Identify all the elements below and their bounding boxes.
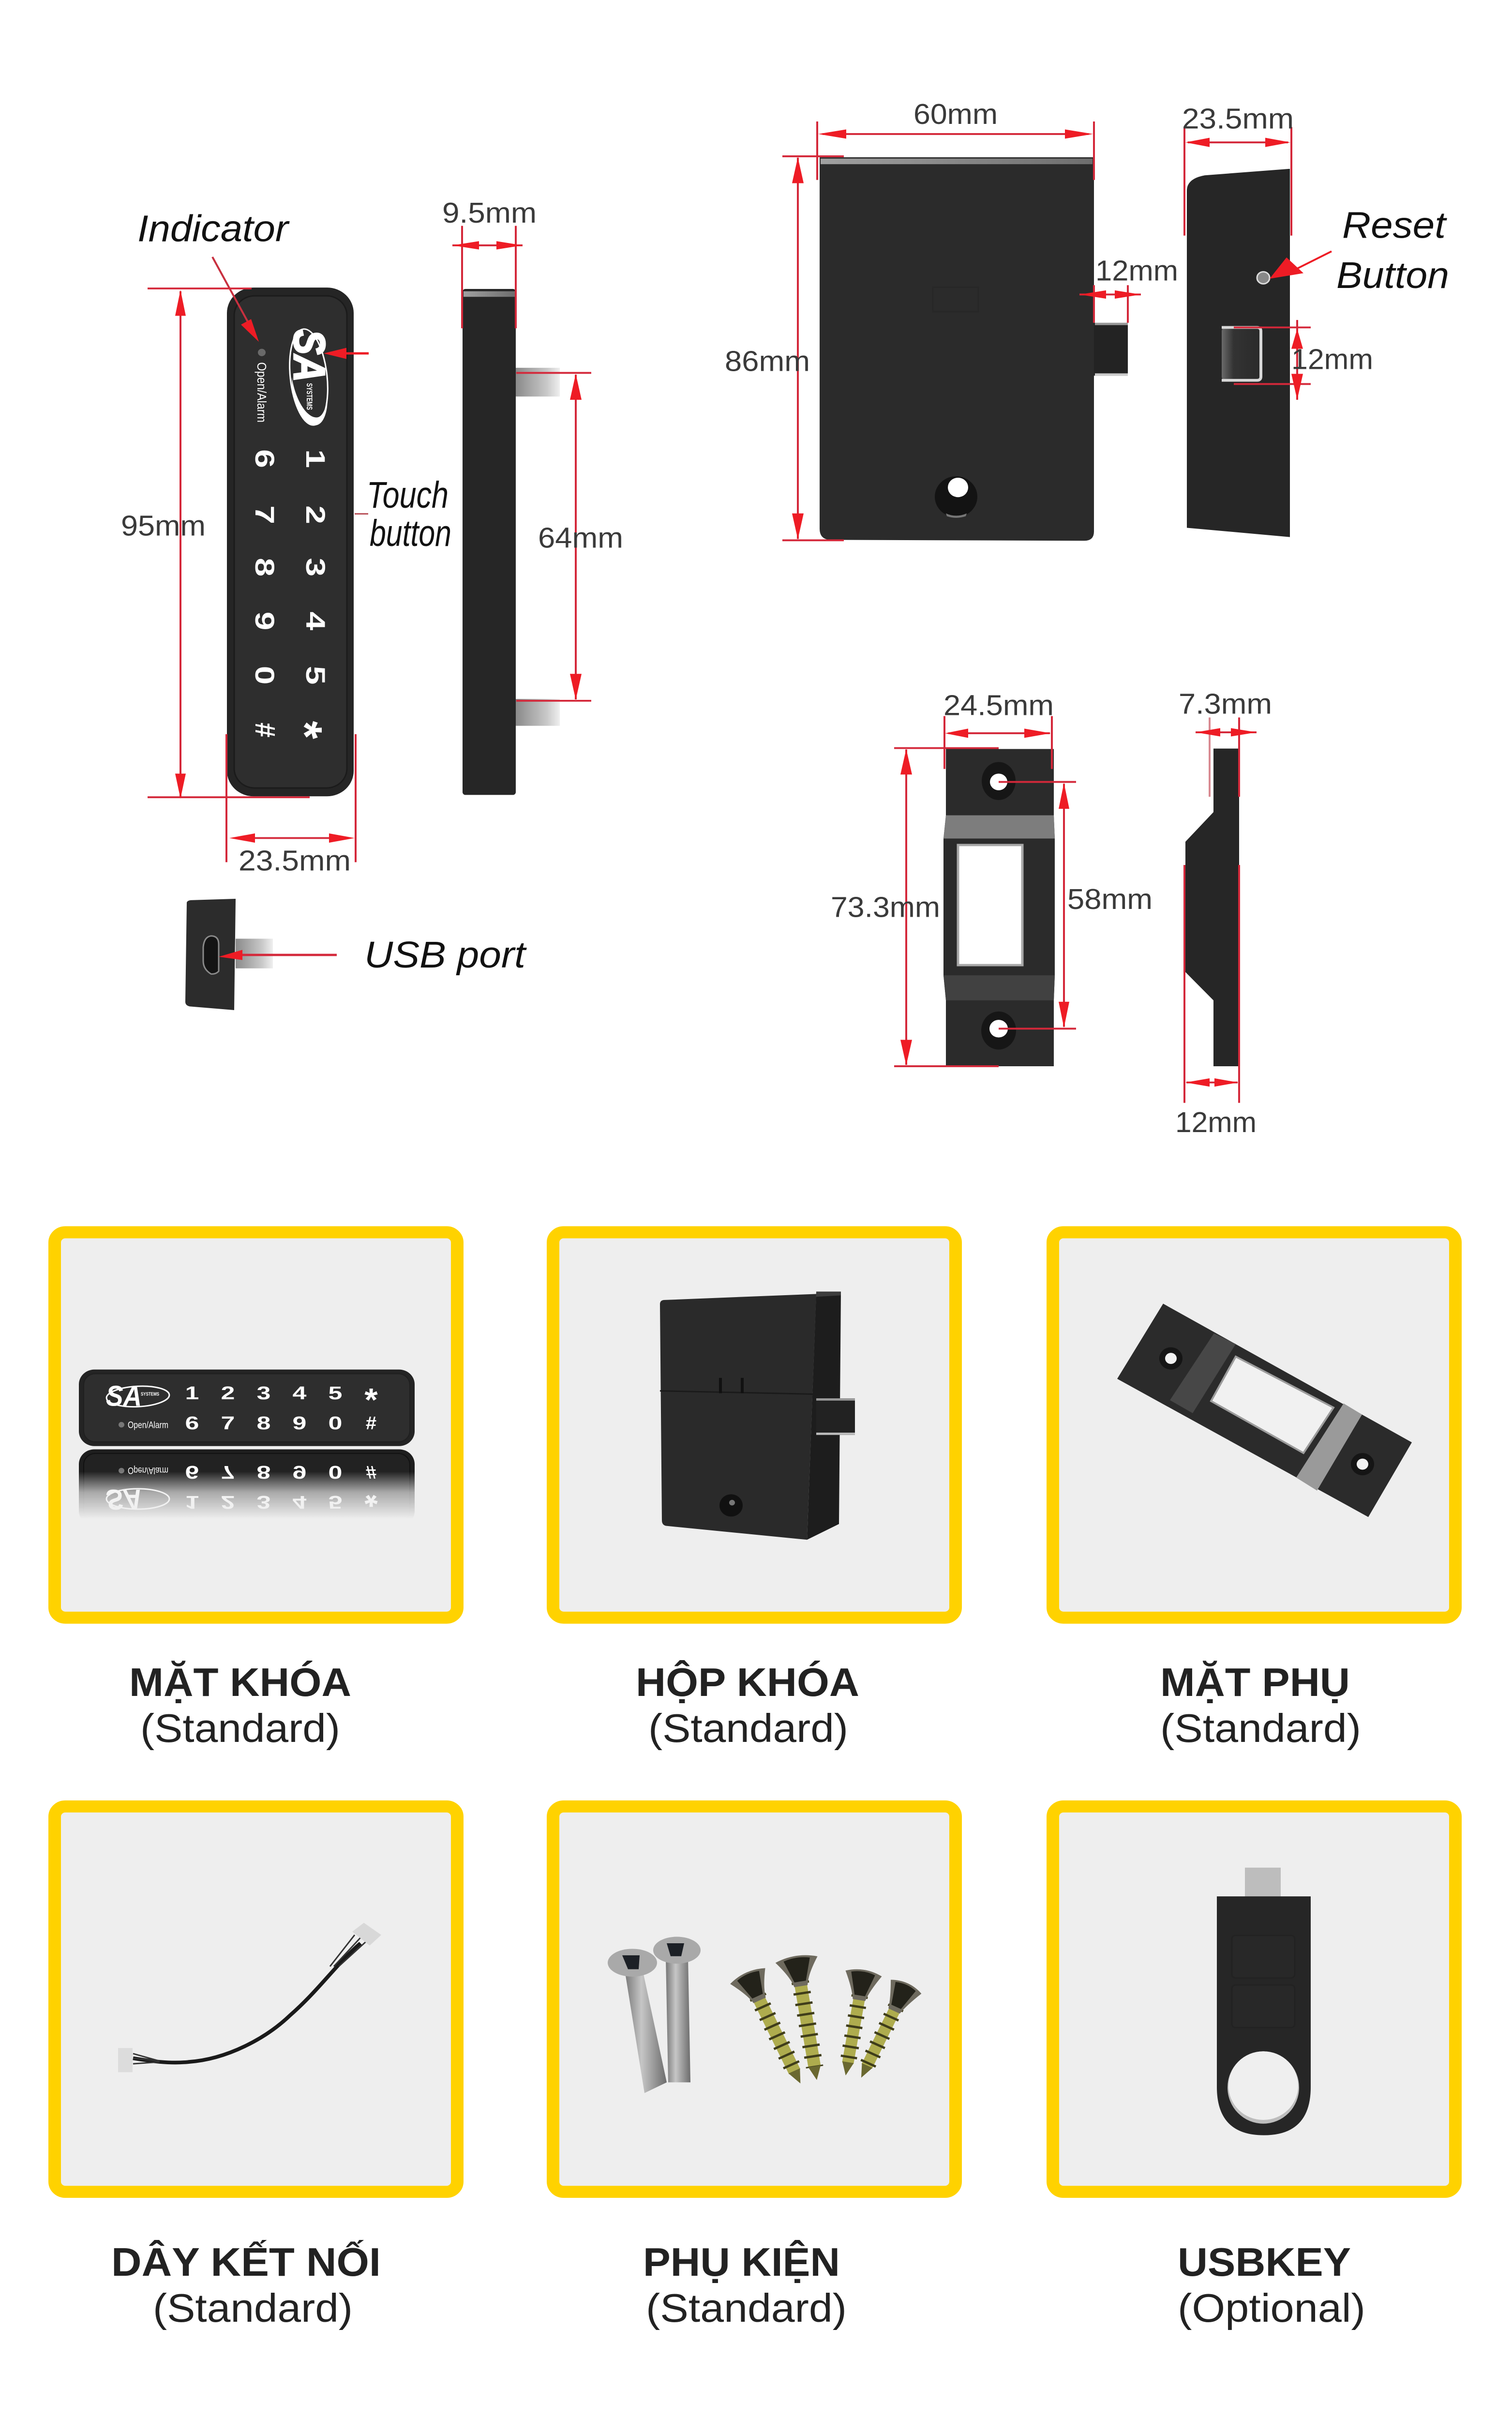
dimension: 60mm <box>817 98 1094 180</box>
lower pin <box>516 699 560 726</box>
horizontal keypad: # <box>366 1413 376 1434</box>
panel: card HỘP KHÓA <box>553 1232 956 1751</box>
keypad reflection: Open/Alarm <box>128 1465 168 1475</box>
caption <box>636 1660 859 1751</box>
dimension: 12mm latch: 12mm <box>1291 343 1373 375</box>
keypad reflection: 5 <box>329 1492 342 1513</box>
caption: (Standard) <box>1160 1706 1361 1751</box>
dimension: 86mm: 86mm <box>725 345 810 377</box>
arrow: reset pointer <box>1270 251 1332 279</box>
dimension: 58mm <box>999 782 1153 1028</box>
horizontal keypad: 2 <box>221 1383 235 1403</box>
reset button label: Button <box>1336 255 1449 296</box>
panel: card DÂY KẾT NỐI <box>55 1806 457 2330</box>
horizontal keypad: 8 <box>257 1413 270 1434</box>
keypad digits: 0 <box>250 666 280 685</box>
panel: strike plate front view <box>943 749 1055 1066</box>
USB key photo <box>1217 1868 1311 2135</box>
reset hole <box>1257 272 1270 284</box>
horizontal keypad: 0 <box>329 1413 342 1434</box>
light strip <box>943 816 1055 838</box>
window <box>958 845 1022 965</box>
caption <box>111 2240 381 2330</box>
caption: (Standard) <box>646 2285 847 2330</box>
horizontal keypad: 6 <box>185 1413 199 1434</box>
horizontal keypad: 9 <box>293 1413 306 1434</box>
panel: lock box side view <box>1187 169 1290 537</box>
plate body <box>943 749 1055 1066</box>
key hole <box>935 476 977 518</box>
SA Systems logo <box>284 327 334 427</box>
keypad reflection: 9 <box>293 1462 306 1482</box>
dimension: 24.5mm: 24.5mm <box>943 689 1054 721</box>
caption: PHỤ KIỆN <box>643 2240 840 2284</box>
USB socket <box>203 936 219 974</box>
cable photo <box>118 1923 381 2072</box>
top screw hole <box>982 762 1016 800</box>
dimension: 12mm strike plate: 12mm <box>1175 1106 1257 1138</box>
keypad digits: 7 <box>250 505 280 524</box>
horizontal keypad: SYSTEMS <box>141 1391 159 1397</box>
Open/Alarm label: Open/Alarm <box>254 362 268 423</box>
keypad reflection: 3 <box>257 1492 270 1513</box>
dimension: 12mm bolt: 12mm <box>1095 255 1178 287</box>
wood screw 2 <box>775 1952 838 2083</box>
USB module body <box>185 899 236 1010</box>
keypad body <box>227 287 354 796</box>
caption <box>129 1660 351 1751</box>
caption: (Standard) <box>140 1706 340 1751</box>
keypad digits <box>249 449 332 740</box>
arrow: logo pointer <box>324 348 369 359</box>
card frame <box>1053 1232 1455 1618</box>
card frame <box>553 1806 956 2192</box>
panel: card USBKEY <box>1053 1806 1455 2330</box>
panel: card MẶT PHỤ <box>1053 1232 1455 1751</box>
reset button label: Reset <box>1342 204 1447 246</box>
keypad digits: 5 <box>300 666 330 685</box>
touch button label <box>355 474 451 554</box>
card frame <box>55 1232 457 1618</box>
reset button label <box>1336 204 1449 296</box>
panel: card PHỤ KIỆN <box>553 1806 956 2330</box>
faint label detail <box>933 287 978 312</box>
panel: strike plate side view <box>1185 749 1239 1066</box>
upper pin <box>516 368 560 396</box>
caption: USBKEY <box>1178 2240 1351 2284</box>
strike plate photo <box>1117 1304 1412 1517</box>
top highlight <box>821 159 1093 164</box>
bottom screw hole <box>981 1012 1016 1049</box>
horizontal keypad: 1 <box>185 1383 199 1403</box>
touch button label: Touch <box>367 474 449 516</box>
arrow: USB pointer <box>219 950 337 960</box>
caption: (Optional) <box>1178 2285 1365 2330</box>
caption <box>643 2240 847 2330</box>
horizontal keypad: 3 <box>257 1383 270 1403</box>
panel: keypad side view <box>463 289 560 795</box>
lock box photo <box>660 1292 855 1540</box>
caption: MẶT PHỤ <box>1160 1660 1350 1705</box>
keypad reflection: SA <box>106 1483 142 1516</box>
latch <box>1222 328 1261 380</box>
keypad digits: 1 <box>300 449 330 468</box>
dimension: 64mm: 64mm <box>538 522 623 554</box>
dimension: 60mm: 60mm <box>913 98 998 130</box>
keypad digits: 2 <box>300 505 330 524</box>
keypad digits: * <box>278 721 332 740</box>
dimension: 64mm <box>516 373 623 701</box>
dimension: 7.3mm: 7.3mm <box>1179 688 1272 720</box>
keypad reflection: 0 <box>329 1462 342 1482</box>
keypad reflection: 7 <box>221 1462 235 1482</box>
keypad digits: 4 <box>300 612 330 630</box>
bolts <box>608 1937 701 2093</box>
keypad digits: 6 <box>250 449 280 468</box>
card frame <box>1053 1806 1455 2192</box>
keypad digits: 9 <box>250 612 280 630</box>
horizontal keypad: 7 <box>221 1413 235 1434</box>
wood screw 4 <box>846 1976 923 2085</box>
caption <box>1178 2240 1365 2330</box>
dimension: 86mm <box>725 156 844 540</box>
keypad reflection <box>79 1449 415 1516</box>
keypad reflection: # <box>366 1462 376 1482</box>
panel: USB port detail <box>185 899 527 1010</box>
keypad reflection: 4 <box>293 1492 307 1513</box>
dimension: 12mm latch <box>1234 320 1373 400</box>
keypad digits: 8 <box>250 558 280 576</box>
keypad reflection: 2 <box>221 1492 235 1513</box>
panel: card MẶT KHÓA <box>55 1232 457 1751</box>
USB port label: USB port <box>364 934 527 975</box>
keypad inner face <box>234 296 347 788</box>
dimension: 95mm <box>121 288 310 799</box>
arrow: indicator pointer <box>212 257 259 342</box>
horizontal keypad: 5 <box>329 1383 342 1403</box>
dimension: 73.3mm <box>831 748 999 1066</box>
dimension: 58mm: 58mm <box>1067 883 1153 915</box>
keypad reflection: 6 <box>185 1462 199 1482</box>
caption: (Standard) <box>648 1706 848 1751</box>
dimension: 9.5mm <box>442 197 537 328</box>
dimension: 7.3mm <box>1179 688 1272 797</box>
keypad reflection: * <box>364 1478 378 1514</box>
USB pin <box>236 938 273 968</box>
dimension: 12mm bolt <box>1079 255 1178 323</box>
dimension: 23.5mm box depth <box>1182 103 1294 236</box>
keypad reflection: 1 <box>185 1492 199 1513</box>
dimension: 23.5mm box depth: 23.5mm <box>1182 103 1294 135</box>
SA Systems logo: SYSTEMS <box>305 383 314 410</box>
top highlight <box>464 291 515 297</box>
caption: HỘP KHÓA <box>636 1660 859 1705</box>
card frame <box>553 1232 956 1618</box>
caption: DÂY KẾT NỐI <box>111 2240 381 2284</box>
dimension: 73.3mm: 73.3mm <box>831 891 940 923</box>
horizontal keypad: * <box>364 1381 378 1418</box>
box body <box>820 157 1094 541</box>
caption: (Standard) <box>153 2285 353 2330</box>
dimension: 23.5mm keypad width <box>226 734 356 877</box>
dimension: 12mm strike plate <box>1175 865 1257 1138</box>
panel: keypad front view <box>227 287 354 796</box>
keypad digits: 3 <box>300 558 330 576</box>
wood screw 1 <box>729 1965 818 2091</box>
horizontal keypad: 4 <box>293 1383 307 1403</box>
side body <box>463 289 516 795</box>
horizontal keypad: Open/Alarm <box>128 1420 168 1430</box>
dimension: 95mm: 95mm <box>121 510 206 542</box>
caption: MẶT KHÓA <box>129 1660 351 1705</box>
dimension: 9.5mm: 9.5mm <box>442 197 537 229</box>
wood screw 3 <box>827 1967 883 2078</box>
keypad digits: # <box>249 723 280 738</box>
touch button label: button <box>370 512 451 554</box>
dimension: 23.5mm keypad width: 23.5mm <box>239 845 351 877</box>
horizontal keypad <box>79 1370 415 1446</box>
dark strip <box>943 975 1055 1000</box>
panel: lock box front view <box>820 157 1128 541</box>
side body <box>1187 169 1290 537</box>
indicator label: Indicator <box>137 208 290 249</box>
keypad reflection: 8 <box>257 1462 270 1482</box>
indicator LED <box>258 349 266 356</box>
dimension: 24.5mm <box>943 689 1054 769</box>
horizontal keypad: SA <box>106 1380 142 1412</box>
SA Systems logo: SA <box>284 329 334 382</box>
card frame <box>55 1806 457 2192</box>
bolt <box>1094 323 1128 376</box>
caption <box>1160 1660 1361 1751</box>
